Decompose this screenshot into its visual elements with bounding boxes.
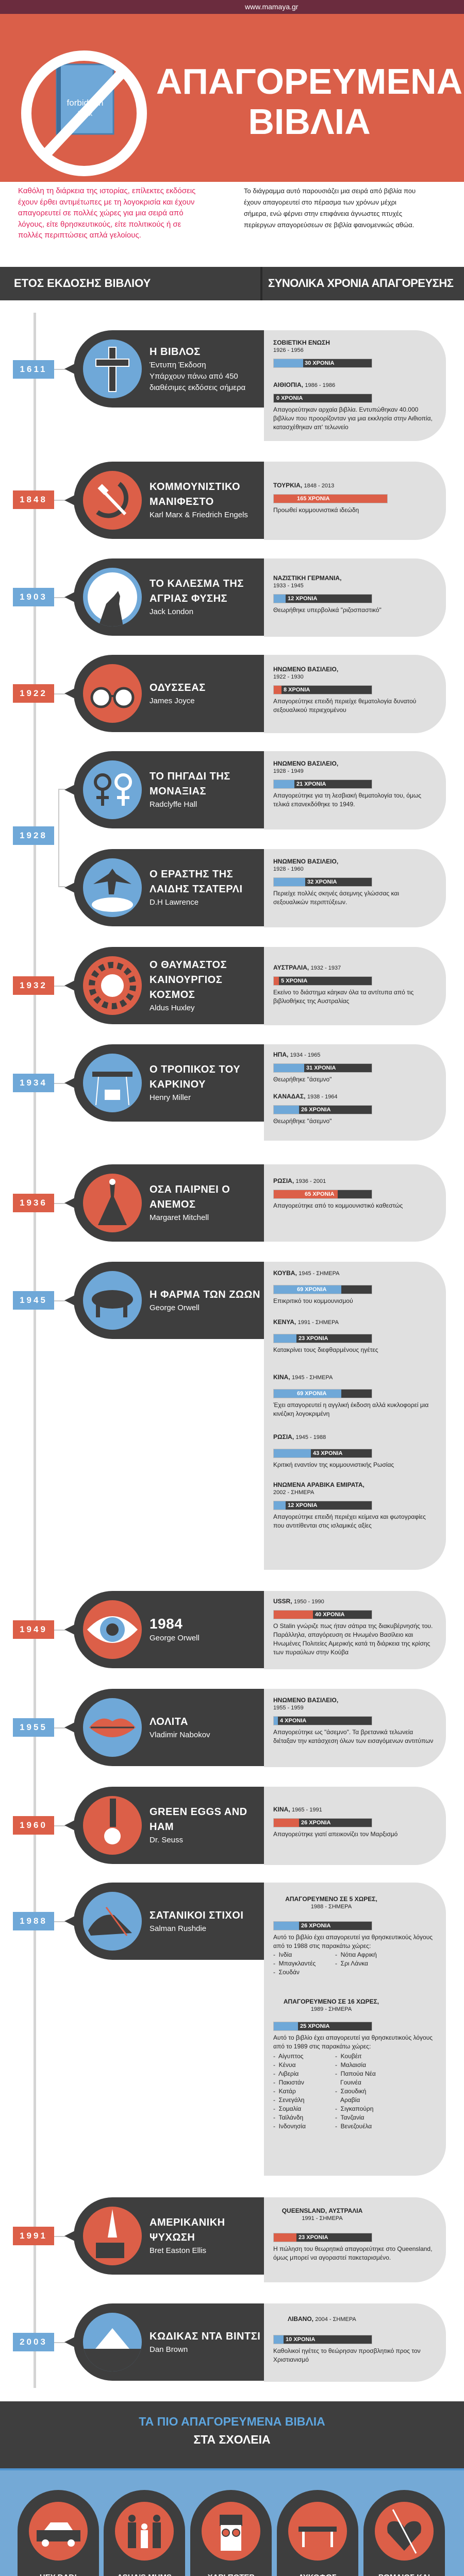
ban info <box>264 1262 446 1570</box>
ban info: Απαγορεύτηκε ως "άσεμνο". Τα βρετανικά τελωνεία διέταξαν την κατάσχεση όλων των εισαγόμενων αντιτύπων <box>273 1728 433 1744</box>
ban info <box>264 330 446 441</box>
ban info: 10 ΧΡΟΝΙΑ <box>286 2336 315 2343</box>
book card: Έντυπη Έκδοση <box>150 361 206 369</box>
year tag <box>13 1074 54 1092</box>
item: Tropic of Cancer <box>13 1044 446 1141</box>
ban info: - Τανζανία <box>335 2114 364 2121</box>
ban info: - Σρι Λάνκα <box>335 1960 368 1967</box>
ban info <box>264 1689 446 1767</box>
ban info: 69 ΧΡΟΝΙΑ <box>297 1286 326 1293</box>
year tag <box>13 588 54 606</box>
ban info: ΡΩΣΙΑ, 1945 - 1988 <box>273 1433 326 1440</box>
year tag: 1988 <box>20 1916 47 1926</box>
ban info <box>264 1164 446 1242</box>
ban info: Καθολικοί ηγέτες το θεώρησαν προσβλητικό προς τον Χριστιανισμό <box>273 2347 421 2363</box>
icon: eye <box>83 1600 142 1659</box>
book card: ΟΣΑ ΠΑΙΡΝΕΙ Ο ΑΝΕΜΟΣ <box>150 1184 230 1210</box>
ban info: - Κουβέιτ <box>335 2053 361 2060</box>
header left: ΕΤΟΣ ΕΚΔΟΣΗΣ ΒΙΒΛΙΟΥ <box>14 277 151 290</box>
book card: ΣΑΤΑΝΙΚΟΙ ΣΤΙΧΟΙ <box>150 1909 243 1921</box>
ban info: 1926 - 1956 <box>273 347 304 353</box>
ban info: 31 ΧΡΟΝΙΑ <box>306 1065 336 1071</box>
ban info: 1928 - 1949 <box>273 768 304 774</box>
ban info: ΚΙΝΑ, 1945 - ΣΗΜΕΡΑ <box>273 1374 333 1381</box>
item: Brave New World <box>13 947 446 1025</box>
icon: hammer and sickle <box>83 471 142 530</box>
icon: female symbols <box>83 760 142 819</box>
ban info: 12 ΧΡΟΝΙΑ <box>288 596 317 602</box>
ban info: - Βενεζουέλα <box>335 2123 372 2130</box>
ban info <box>264 1044 446 1141</box>
ban info: 43 ΧΡΟΝΙΑ <box>313 1450 342 1456</box>
book card: D.H Lawrence <box>150 898 198 907</box>
ban info: 30 ΧΡΟΝΙΑ <box>305 360 334 366</box>
ban info: 23 ΧΡΟΝΙΑ <box>299 1335 328 1342</box>
item: Bible <box>13 330 446 441</box>
book card: ΚΩΔΙΚΑΣ ΝΤΑ ΒΙΝΤΣΙ <box>150 2331 260 2342</box>
ban info: QUEENSLAND, ΑΥΣΤΡΑΛΙΑ <box>282 2207 362 2214</box>
item: Animal Farm <box>13 1262 446 1570</box>
icon: taxi <box>29 2502 88 2561</box>
item: American Psycho <box>13 2197 446 2282</box>
ban info <box>264 2197 446 2282</box>
ban info: USSR, 1950 - 1990 <box>273 1598 324 1605</box>
year tag: 1936 <box>20 1198 47 1208</box>
icon: woman under umbrella <box>83 1054 142 1112</box>
ban info: 26 ΧΡΟΝΙΑ <box>301 1923 330 1929</box>
section header: schools: ΣΤΑ ΣΧΟΛΕΙΑ <box>193 2433 271 2446</box>
ban info: - Σουδάν <box>273 1969 300 1976</box>
ban info: Απαγορεύτηκε επειδή περιέχει κείμενα και φωτογραφίες που αντιτίθενται στις ισλαμικές αξίες <box>273 1513 426 1529</box>
ban info <box>264 947 446 1025</box>
icon: hat figure <box>83 1796 142 1855</box>
year tag: 1945 <box>20 1295 47 1305</box>
ban info: Προωθεί κομμουνιστικά ιδεώδη <box>273 506 359 514</box>
ban info: 26 ΧΡΟΝΙΑ <box>301 1820 330 1826</box>
book card: ΤΟ ΠΗΓΑΔΙ ΤΗΣ ΜΟΝΑΞΙΑΣ <box>150 771 230 797</box>
year tag <box>13 1291 54 1310</box>
timeline line <box>34 313 36 2388</box>
ban info: 69 ΧΡΟΝΙΑ <box>297 1391 326 1397</box>
book card: Ο ΘΑΥΜΑΣΤΟΣ ΚΑΙΝΟΥΡΓΙΟΣ ΚΟΣΜΟΣ <box>150 959 227 1001</box>
ban info: - Ταϊλάνδη <box>273 2114 303 2121</box>
icon: family <box>115 2502 174 2561</box>
ban info <box>264 655 446 733</box>
book card: GREEN EGGS AND HAM <box>150 1806 247 1833</box>
ban info: - Αίγυπτος <box>273 2053 304 2060</box>
ban info: ΚΕΝΥΑ, 1991 - ΣΗΜΕΡΑ <box>273 1318 339 1326</box>
title <box>156 61 462 142</box>
ban info <box>264 462 446 540</box>
book card <box>64 558 264 636</box>
intro left: Καθόλη τη διάρκεια της ιστορίας, επίλεκτες εκδόσεις έχουν έρθει αντιμέτωπες με τη λογοκρισία και έχουν απαγορευτεί σε πολλές χώρες για μια σειρά από λόγους, είτε θρησκευτικούς, είτε πολιτικούς ή σε πολλές περιπτώσεις απλά γελοίους. <box>18 187 195 240</box>
book card: ΛΟΛΙΤΑ <box>150 1716 188 1727</box>
book card: Aldus Huxley <box>150 1004 195 1012</box>
icon: slipper <box>83 1892 142 1951</box>
ban info: 1989 - ΣΗΜΕΡΑ <box>311 2006 352 2012</box>
item: Communist Manifesto <box>13 462 446 540</box>
ban info: ΗΝΩΜΕΝΟ ΒΑΣΙΛΕΙΟ, <box>273 760 338 767</box>
ban info: ΣΟΒΙΕΤΙΚΗ ΕΝΩΣΗ <box>273 339 330 346</box>
ban info: Αραβία <box>340 2096 360 2104</box>
school card: Asha's Mums <box>104 2490 185 2576</box>
book card: Dan Brown <box>150 2345 188 2353</box>
title: ΑΠΑΓΟΡΕΥΜΕΝΑ <box>156 61 462 101</box>
top bar <box>0 0 464 14</box>
year tag <box>13 1718 54 1737</box>
icon: forbidden book: forbidden <box>67 98 103 108</box>
ban info: Απαγορεύτηκε από το κομμουνιστικό καθεστώς <box>273 1202 403 1209</box>
school card: Hey Dad <box>18 2490 99 2576</box>
ban info: ΚΙΝΑ, 1965 - 1991 <box>273 1806 322 1813</box>
year tag: 1949 <box>20 1624 47 1634</box>
year tag: 2003 <box>20 2337 47 2347</box>
ban info: ΑΠΑΓΟΡΕΥΜΕΝΟ ΣΕ 16 ΧΩΡΕΣ, <box>284 1998 379 2005</box>
book card: Η ΒΙΒΛΟΣ <box>150 346 201 358</box>
ban info: - Πακιστάν <box>273 2079 304 2086</box>
icon: coffin table <box>288 2502 347 2561</box>
book card: James Joyce <box>150 697 195 705</box>
book card: Vladimir Nabokov <box>150 1730 210 1739</box>
book card: Ο ΕΡΑΣΤΗΣ ΤΗΣ ΛΑΙΔΗΣ ΤΣΑΤΕΡΛΙ <box>150 869 243 895</box>
section header: schools <box>0 2401 464 2470</box>
year tag <box>13 684 54 703</box>
ban info: - Σιγκαπούρη <box>335 2105 373 2112</box>
ban info: ΝΑΖΙΣΤΙΚΗ ΓΕΡΜΑΝΙΑ, <box>273 574 341 582</box>
item: Lady Chatterley <box>64 849 446 927</box>
book card: Margaret Mitchell <box>150 1213 209 1222</box>
icon: knife and card <box>83 2207 142 2265</box>
intro right: Το διάγραμμα αυτό παρουσιάζει μια σειρά από βιβλία που έχουν απαγορευτεί στο πέρασμα των χρόνων μέχρι σήμερα, ενώ φέρνει στην επιφάνεια άγνωστες πτυχές περίεργων απαγορεύσεων σε βιβλία φαινομενικώς αθώα. <box>244 187 416 229</box>
book card <box>64 2197 264 2275</box>
ban info: 23 ΧΡΟΝΙΑ <box>299 2234 328 2241</box>
icon: forbidden book <box>21 50 147 176</box>
schools panel <box>0 2470 464 2576</box>
year tag: 1934 <box>20 1078 47 1088</box>
item: Gone with the Wind <box>13 1164 446 1242</box>
book card <box>64 1262 264 1339</box>
year tag: 1848 <box>20 495 47 504</box>
year tag <box>13 490 54 509</box>
year tag <box>13 1816 54 1835</box>
icon: pig <box>83 1271 142 1330</box>
book card: Υπάρχουν πάνω από 450 διαθέσιμες εκδόσεις σήμερα <box>150 372 245 392</box>
ban info: ΤΟΥΡΚΙΑ, 1848 - 2013 <box>273 482 334 489</box>
book card: Salman Rushdie <box>150 1924 206 1933</box>
year tag <box>13 2333 54 2351</box>
ban info: 1955 - 1959 <box>273 1705 304 1711</box>
item: Lolita <box>13 1689 446 1767</box>
ban info: - Ινδία <box>273 1951 292 1958</box>
ban info: 25 ΧΡΟΝΙΑ <box>300 2023 329 2029</box>
ban info: 8 ΧΡΟΝΙΑ <box>284 687 310 693</box>
ban info: 21 ΧΡΟΝΙΑ <box>296 781 326 787</box>
book card <box>64 751 264 828</box>
ban info: ΚΟΥΒΑ, 1945 - ΣΗΜΕΡΑ <box>273 1269 339 1277</box>
icon: cross <box>83 340 142 398</box>
book card: ΤΟ ΚΑΛΕΣΜΑ ΤΗΣ ΑΓΡΙΑΣ ΦΥΣΗΣ <box>150 578 244 604</box>
section header: schools: ΤΑ ΠΙΟ ΑΠΑΓΟΡΕΥΜΕΝΑ ΒΙΒΛΙΑ <box>139 2415 325 2428</box>
book card <box>64 1883 264 1960</box>
year tag: 1611 <box>20 364 47 374</box>
book card <box>64 1787 264 1864</box>
ban info: - Σομαλία <box>273 2105 301 2112</box>
book card: ΚΟΜΜΟΥΝΙΣΤΙΚΟ ΜΑΝΙΦΕΣΤΟ <box>150 481 240 507</box>
school card: Romeo and Juliet <box>363 2490 445 2576</box>
ban info: - Ινδονησία <box>273 2123 306 2130</box>
year tag <box>13 1194 54 1212</box>
ban info: Απαγορεύτηκε επειδή περιείχε θεματολογία δυνατού σεξουαλικού περιεχομένου <box>273 698 416 714</box>
icon: dress <box>83 1174 142 1232</box>
icon: embryo gear <box>83 956 142 1015</box>
ban info: ΗΝΩΜΕΝΟ ΒΑΣΙΛΕΙΟ, <box>273 666 338 673</box>
year tag <box>13 2227 54 2245</box>
book card: Η ΦΑΡΜΑ ΤΩΝ ΖΩΩΝ <box>150 1289 260 1300</box>
icon: pheasant <box>83 858 142 917</box>
ban info: Έχει απαγορευτεί η αγγλική έκδοση αλλά κυκλοφορεί μια κινέζικη λογοκριμένη <box>273 1401 428 1417</box>
book card: Ο ΤΡΟΠΙΚΟΣ ΤΟΥ ΚΑΡΚΙΝΟΥ <box>150 1064 240 1090</box>
item: Green Eggs and Ham <box>13 1787 446 1865</box>
ban info <box>264 558 446 637</box>
book card <box>64 330 264 408</box>
item: Call of the Wild <box>13 558 446 637</box>
ban info <box>264 1591 446 1669</box>
ban info: Η πώληση του θεωρητικά απαγορεύτηκε στο Queensland, όμως μπορεί να αγοραστεί πακεταρισμένο. <box>273 2245 432 2261</box>
icon: forbidden book: book <box>78 110 93 117</box>
book card <box>64 1689 264 1766</box>
ban info: - Νότια Αφρική <box>335 1951 377 1958</box>
ban info: 0 ΧΡΟΝΙΑ <box>276 395 303 401</box>
icon: lips <box>83 1698 142 1757</box>
book card <box>64 947 264 1024</box>
ban info: 12 ΧΡΟΝΙΑ <box>288 1502 317 1509</box>
ban info: Απαγορεύτηκε γιατί απεικονίζει τον Μαρξισμό <box>273 1831 397 1838</box>
icon: glasses <box>83 664 142 723</box>
ban info: Εκείνο το διάστημα κάηκαν όλα τα αντίτυπα από τις βιβλιοθήκες της Αυστραλίας <box>273 989 413 1005</box>
site url: www.mamaya.gr <box>245 3 298 11</box>
year tag: 1903 <box>20 592 47 602</box>
year tag <box>13 360 54 379</box>
ban info: 5 ΧΡΟΝΙΑ <box>281 978 307 984</box>
book card: Henry Miller <box>150 1093 191 1102</box>
book card: 1984 <box>150 1616 183 1632</box>
book card <box>64 1164 264 1242</box>
book card: Dr. Seuss <box>150 1836 183 1844</box>
ban info: - Μπαγκλαντές <box>273 1960 316 1967</box>
ban info: 1991 - ΣΗΜΕΡΑ <box>302 2215 343 2222</box>
ban info <box>264 1883 446 2176</box>
hero banner <box>0 14 464 182</box>
book card: Karl Marx & Friedrich Engels <box>150 511 248 519</box>
item: Satanic Verses <box>13 1883 446 2176</box>
ban info: 2002 - ΣΗΜΕΡΑ <box>273 1489 314 1496</box>
year tag: 1960 <box>20 1820 47 1830</box>
ban info: Κριτική εναντίον της κομμουνιστικής Ρωσίας <box>273 1461 394 1468</box>
ban info: ΑΥΣΤΡΑΛΙΑ, 1932 - 1937 <box>273 964 341 971</box>
ban info: 165 ΧΡΟΝΙΑ <box>297 496 330 502</box>
ban info: 1922 - 1930 <box>273 674 304 680</box>
column headers <box>0 267 464 300</box>
ban info: 40 ΧΡΟΝΙΑ <box>315 1612 344 1618</box>
ban info: Γουινέα <box>340 2079 361 2086</box>
book card: Radclyffe Hall <box>150 800 197 809</box>
year tag <box>13 1620 54 1639</box>
year tag: 1922 <box>20 688 47 698</box>
item: Well of Loneliness <box>64 751 446 829</box>
ban info <box>264 849 446 927</box>
ban info: Αυτό το βιβλίο έχει απαγορευτεί για θρησκευτικούς λόγους από το 1989 στις παρακάτω χώρες: <box>273 2034 433 2050</box>
book card <box>64 462 264 539</box>
book card: George Orwell <box>150 1634 200 1642</box>
year tag: 1991 <box>20 2231 47 2241</box>
year tag: 1955 <box>20 1722 47 1732</box>
book card <box>64 2303 264 2381</box>
ban info <box>264 2303 446 2382</box>
year tag <box>13 1912 54 1930</box>
ban info: Θεωρήθηκε "άσεμνο" <box>273 1117 332 1125</box>
ban info: Περιείχε πολλές σκηνές άσεμνης γλώσσας και σεξουαλικών περιπτύξεων. <box>273 890 399 906</box>
item: 1984 <box>13 1591 446 1669</box>
book card <box>64 655 264 732</box>
ban info: ΗΠΑ, 1934 - 1965 <box>273 1051 320 1058</box>
school card: Harry Potter <box>190 2490 272 2576</box>
ban info: 32 ΧΡΟΝΙΑ <box>307 879 337 885</box>
title: ΒΙΒΛΙΑ <box>248 101 371 142</box>
header right: ΣΥΝΟΛΙΚΑ ΧΡΟΝΙΑ ΑΠΑΓΟΡΕΥΣΗΣ <box>268 277 453 290</box>
ban info: Επικριτικό του κομμουνισμού <box>273 1297 353 1304</box>
year tag: 1932 <box>20 980 47 990</box>
book card: Jack London <box>150 607 193 616</box>
ban info: Απαγορεύτηκαν αρχαία βιβλία. Εντυπώθηκαν 40.000 βιβλίων που προορίζονταν για μια εκκλησία στην Αιθιοπία, κατασχέθηκαν απ' τελωνείο <box>273 406 433 431</box>
ban info: 4 ΧΡΟΝΙΑ <box>280 1718 306 1724</box>
icon: wolf howling at moon <box>83 568 142 626</box>
ban info: ΗΝΩΜΕΝΟ ΒΑΣΙΛΕΙΟ, <box>273 1697 338 1704</box>
ban info <box>264 751 446 829</box>
ban info: - Παπούα Νέα <box>335 2070 376 2077</box>
ban info: ΗΝΩΜΕΝΑ ΑΡΑΒΙΚΑ ΕΜΙΡΑΤΑ, <box>273 1481 364 1488</box>
item: Da Vinci Code <box>13 2303 446 2382</box>
school card: Twilight <box>277 2490 358 2576</box>
ban info: Θεωρήθηκε υπερβολικά "ριζοσπαστικό" <box>273 606 382 614</box>
year tag 1928 shared: 1928 <box>20 831 47 840</box>
ban info: 1988 - ΣΗΜΕΡΑ <box>311 1904 352 1910</box>
book card: ΑΜΕΡΙΚΑΝΙΚΗ ΨΥΧΩΣΗ <box>150 2217 225 2243</box>
icon: Harry face <box>202 2502 260 2561</box>
ban info: - Σενεγάλη <box>273 2096 304 2104</box>
ban info: Απαγορεύτηκε για τη λεσβιακή θεματολογία του, όμως τελικά επανεκδόθηκε το 1949. <box>273 792 421 808</box>
ban info: Θεωρήθηκε "άσεμνο" <box>273 1076 332 1083</box>
ban info: ΚΑΝΑΔΑΣ, 1938 - 1964 <box>273 1093 338 1100</box>
ban info: ΡΩΣΙΑ, 1936 - 2001 <box>273 1177 326 1184</box>
year tag <box>13 976 54 995</box>
book card <box>64 849 264 926</box>
book card <box>64 1591 264 1668</box>
ban info: Ο Stalin γνώριζε πως ήταν σάτιρα της διακυβέρνησής του. Παράλληλα, απαγόρευση σε Ηνωμένο Βασίλειο και Ηνωμένες Πολιτείες Αμερικής κατά τη διάρκεια της κρίσης των πυραύλων στην Κούβα <box>273 1622 433 1656</box>
ban info: - Σαουδική <box>335 2088 366 2095</box>
ban info: ΛΙΒΑΝΟ, 2004 - ΣΗΜΕΡΑ <box>288 2315 356 2323</box>
ban info: - Μαλαισία <box>335 2061 366 2069</box>
ban info: Κατακρίνει τους διεφθαρμένους ηγέτες <box>273 1346 378 1353</box>
ban info: 1933 - 1945 <box>273 583 304 589</box>
icon: pyramid <box>83 2313 142 2371</box>
icon: heart with dagger <box>375 2502 434 2561</box>
ban info: - Κατάρ <box>273 2088 296 2095</box>
ban info: ΑΠΑΓΟΡΕΥΜΕΝΟ ΣΕ 5 ΧΩΡΕΣ, <box>285 1895 377 1903</box>
book card: Bret Easton Ellis <box>150 2246 206 2255</box>
book card <box>64 1044 264 1122</box>
ban info: Αυτό το βιβλίο έχει απαγορευτεί για θρησκευτικούς λόγους από το 1988 στις παρακάτω χώρες: <box>273 1934 433 1950</box>
item: Ulysses <box>13 655 446 733</box>
book card: ΟΔΥΣΣΕΑΣ <box>150 682 206 693</box>
ban info: 65 ΧΡΟΝΙΑ <box>305 1191 334 1197</box>
book card: George Orwell <box>150 1303 200 1312</box>
ban info: ΑΙΘΙΟΠΙΑ, 1986 - 1986 <box>273 381 335 388</box>
ban info: - Λιβερία <box>273 2070 299 2077</box>
ban info: - Κένυα <box>273 2061 296 2069</box>
ban info <box>264 1787 446 1865</box>
ban info: ΗΝΩΜΕΝΟ ΒΑΣΙΛΕΙΟ, <box>273 858 338 865</box>
ban info: 1928 - 1960 <box>273 866 304 872</box>
ban info: 26 ΧΡΟΝΙΑ <box>301 1107 330 1113</box>
